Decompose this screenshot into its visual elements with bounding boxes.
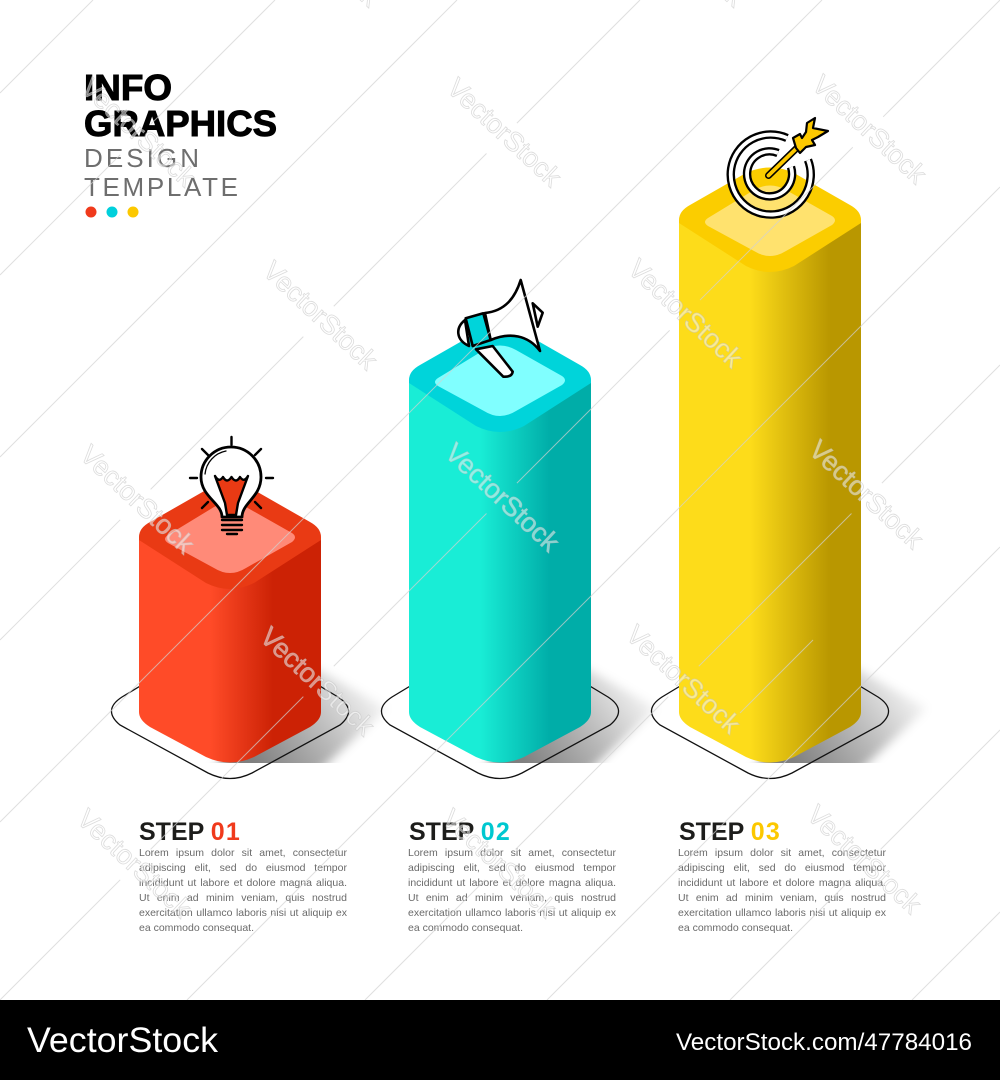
floor shadow [482,668,651,763]
text block: step 03: exercitation ullamco laboris nisi ut aliquip ex [678,907,886,919]
step 02 heading: STEP 02 [409,818,511,846]
text block: step 02: Ut enim ad minim veniam, quis nostrud [408,892,616,904]
heading: info graphics: INFO [84,67,172,108]
bar body [409,380,591,762]
watermark overlay: VectorStock [439,437,565,558]
watermark overlay: VectorStock [801,799,927,920]
infographic artwork [84,74,922,840]
top face [679,168,861,272]
text block: step 01: Lorem ipsum dolor sit amet, consectetur [139,847,347,859]
top inset [435,346,565,416]
heading: info graphics: GRAPHICS [84,103,277,144]
floor shadow [212,668,381,763]
top face [409,328,591,432]
icon: light bulb [190,437,273,534]
top face [139,484,321,589]
floor shadow [752,668,922,763]
text block: step 02: Lorem ipsum dolor sit amet, consectetur [408,847,616,859]
text block: step 01: adipiscing elit, sed do eiusmod tempor [139,862,347,874]
base tile outline [111,642,349,778]
subheading: design template [84,143,238,202]
step headings [139,818,781,846]
bar: step 01 red [111,437,387,778]
icon: megaphone [458,280,543,377]
text block: step 03: ea commodo consequat. [678,922,793,934]
watermark overlay: VectorStock [71,803,197,924]
heading: info graphics [84,67,277,144]
text block: step 02: adipiscing elit, sed do eiusmod tempor [408,862,616,874]
footer bar [0,1000,1000,1080]
text block: step 02: incididunt ut labore et dolore magna aliqua. [408,877,616,889]
text block: step 03 [678,847,886,934]
text block: step 03: incididunt ut labore et dolore magna aliqua. [678,877,886,889]
watermark overlay: VectorStock [254,621,380,742]
bar: step 03 yellow [651,118,927,778]
icon: target with arrow [731,118,828,215]
text block: step 01: incididunt ut labore et dolore magna aliqua. [139,877,347,889]
watermark overlay: VectorStock [803,434,929,555]
step 01 heading: STEP 01 [139,818,241,846]
footer logo text: VectorStock [27,1021,219,1060]
watermark overlay: VectorStock [75,72,201,193]
footer image id: VectorStock.com/47784016 [676,1029,972,1056]
text block: step 01: exercitation ullamco laboris nisi ut aliquip ex [139,907,347,919]
watermark overlay: VectorStock [436,803,562,924]
bar: step 02 cyan [381,280,657,778]
text block: step 03: Lorem ipsum dolor sit amet, consectetur [678,847,886,859]
base tile outline [381,642,619,778]
bar body [139,537,321,762]
text block: step 01 [139,847,347,934]
watermark overlay: VectorStock [74,439,200,560]
top inset [165,502,295,573]
watermark overlay: VectorStock [257,255,383,376]
text block: step 03: adipiscing elit, sed do eiusmod tempor [678,862,886,874]
text block: step 01: ea commodo consequat. [139,922,254,934]
text block: step 02: ea commodo consequat. [408,922,523,934]
watermark overlay: VectorStock [622,253,748,374]
title block [84,67,277,218]
text block: step 03: Ut enim ad minim veniam, quis nostrud [678,892,886,904]
top inset [705,186,835,256]
watermark overlay: VectorStock [620,619,746,740]
subheading: design template: DESIGN [84,143,199,173]
subheading: design template: TEMPLATE [84,172,238,202]
text block: step 01: Ut enim ad minim veniam, quis nostrud [139,892,347,904]
text block: step 02: exercitation ullamco laboris nisi ut aliquip ex [408,907,616,919]
watermark overlay: VectorStock [806,69,932,190]
text block: step 02 [408,847,616,934]
watermark overlay: VectorStock [441,72,567,193]
step 03 heading: STEP 03 [679,818,781,846]
three coloured dots [86,206,138,218]
bar body [679,220,861,762]
base tile outline [651,642,889,778]
